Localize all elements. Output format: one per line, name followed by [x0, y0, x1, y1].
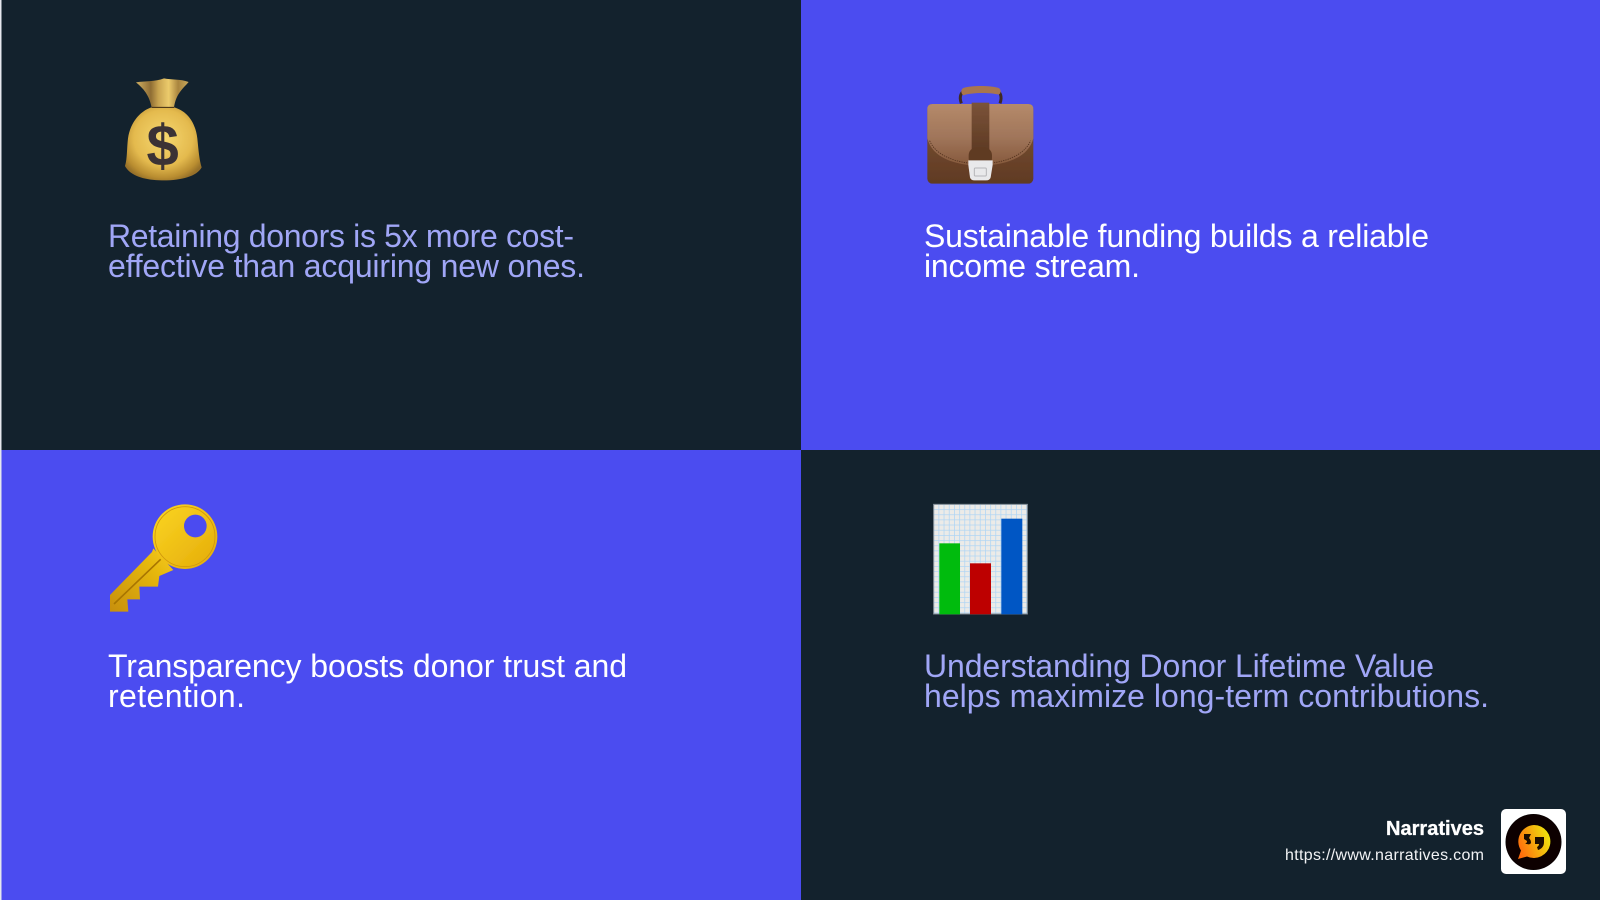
text: transparency: Transparency boosts donor trust and [108, 648, 627, 684]
panel: briefcase insight [801, 0, 1600, 450]
text: retaining donors [108, 218, 585, 284]
icon: money bag [125, 78, 202, 180]
icon: briefcase [927, 86, 1033, 184]
icon: bar chart [933, 504, 1028, 614]
text: donor lifetime value [924, 648, 1489, 714]
left edge strip [0, 0, 2, 900]
panel: bar chart insight [801, 450, 1600, 900]
text: sustainable funding: Sustainable funding builds a reliable [924, 218, 1429, 254]
text: donor lifetime value: Understanding Donor Lifetime Value [924, 648, 1434, 684]
brand url: https://www.narratives.com [1285, 847, 1484, 864]
panel: key insight [0, 450, 801, 900]
text: transparency [108, 648, 627, 714]
text: donor lifetime value: helps maximize long-term contributions. [924, 678, 1489, 714]
text: sustainable funding [924, 218, 1429, 284]
text: sustainable funding: income stream. [924, 248, 1140, 284]
text: retaining donors: effective than acquiring new ones. [108, 248, 585, 284]
logo [1501, 809, 1566, 874]
text: transparency: retention. [108, 678, 245, 714]
icon: key [110, 504, 217, 612]
text: retaining donors: Retaining donors is 5x more cost- [108, 218, 574, 254]
panel: money bag insight [0, 0, 801, 450]
brand name: Narratives [1386, 818, 1484, 840]
icon: money bag: $ [147, 114, 179, 178]
